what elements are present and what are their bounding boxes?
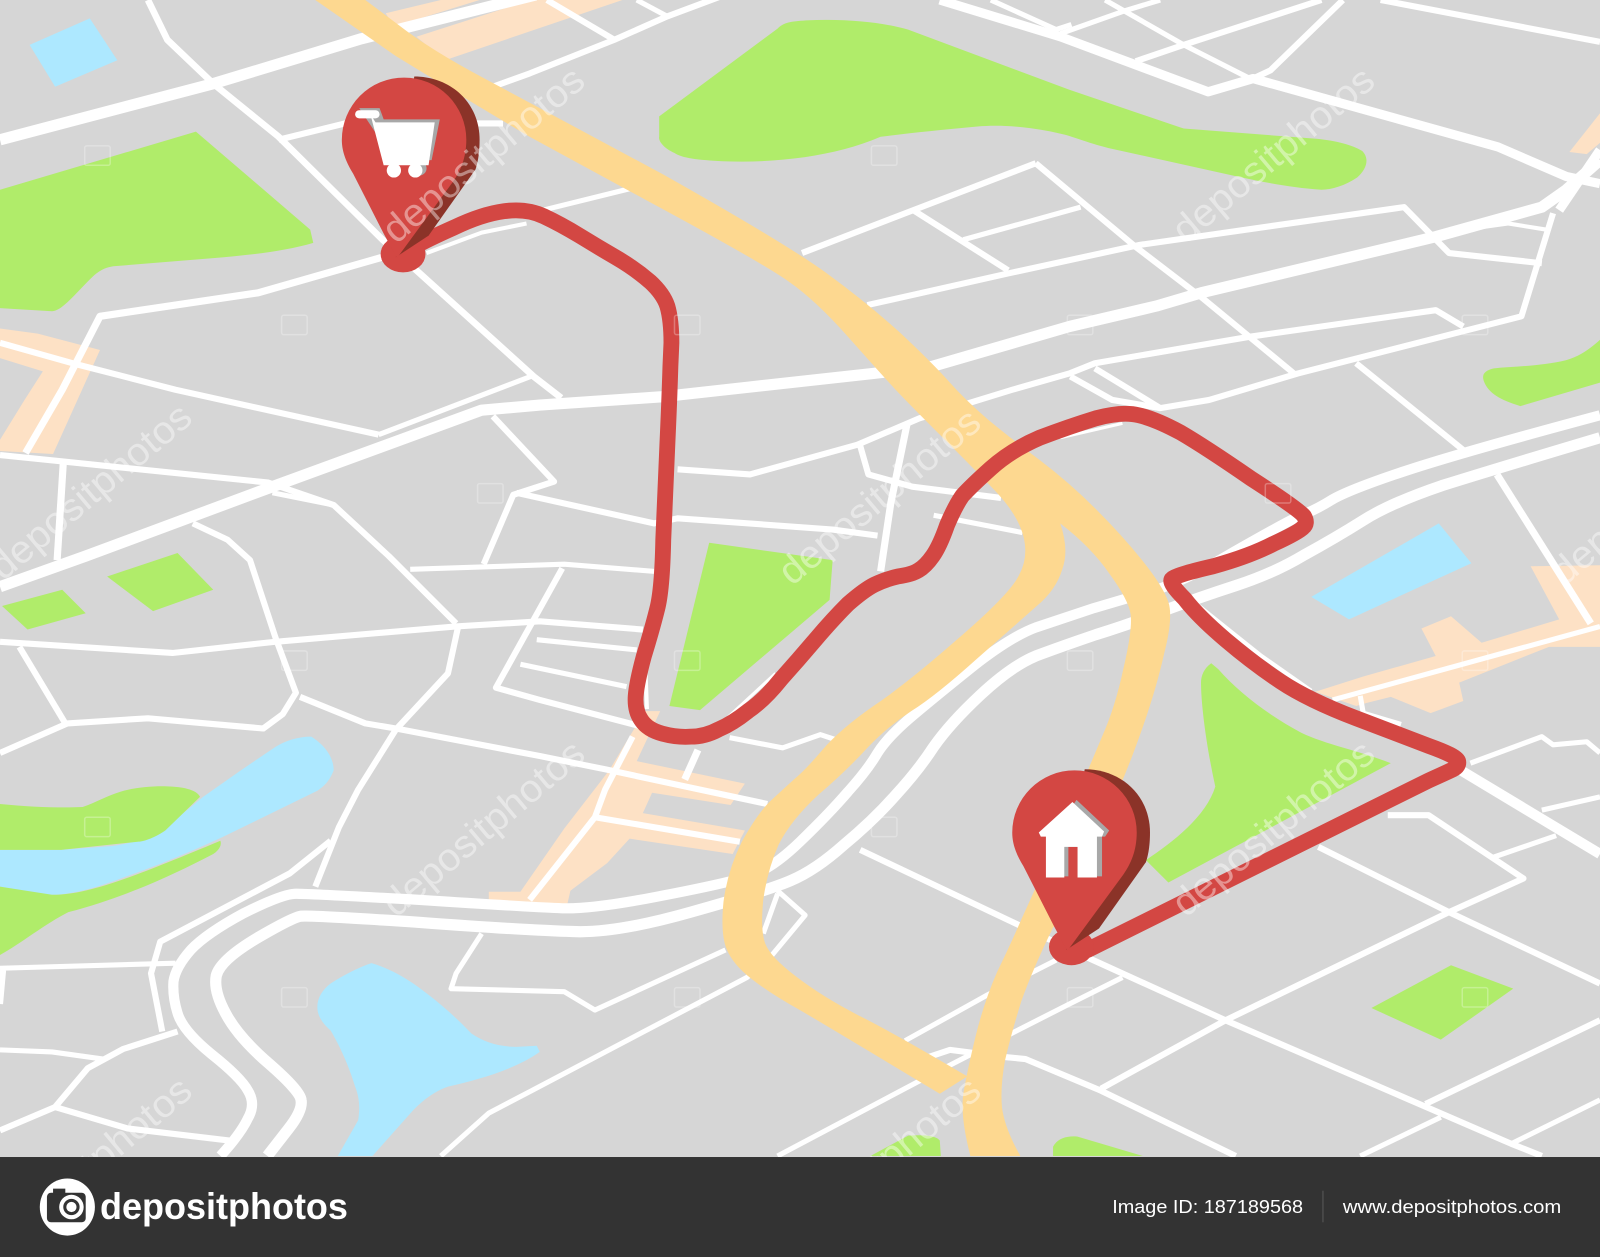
watermark: depositphotos text: depositphotos bbox=[770, 400, 989, 594]
pin shadow side bbox=[396, 77, 480, 257]
watermark: depositphotos text: depositphotos bbox=[1164, 732, 1383, 925]
pin: shopping cart bbox=[342, 77, 480, 272]
peach districts bbox=[0, 0, 1600, 904]
watermark: depositphotos text: depositphotos bbox=[374, 58, 593, 252]
icon: shopping cart bbox=[355, 108, 440, 178]
pin shadow side bbox=[1066, 769, 1150, 950]
image id: Image ID: 187189568 bbox=[1112, 1196, 1303, 1217]
pin: home bbox=[1012, 769, 1150, 965]
pin base bbox=[1049, 928, 1094, 965]
watermark: camera marks bbox=[85, 146, 1488, 1007]
red route line bbox=[403, 210, 1458, 950]
watermark: depositphotos text: depositphotos bbox=[770, 1068, 989, 1257]
icon: depositphotos camera logo bbox=[40, 1178, 95, 1236]
pin head bbox=[342, 78, 466, 258]
pin base bbox=[381, 236, 426, 272]
pin head bbox=[1012, 770, 1137, 951]
footer bar bbox=[0, 1157, 1600, 1257]
watermark: depositphotos text: depositphotos bbox=[1164, 58, 1383, 252]
watermark: depositphotos text: depositphotos bbox=[374, 732, 593, 925]
icon: house bbox=[1039, 800, 1109, 877]
logo wordmark: depositphotos bbox=[100, 1186, 348, 1227]
orange highway bbox=[315, 0, 1170, 1156]
website url: www.depositphotos.com bbox=[1342, 1196, 1561, 1217]
